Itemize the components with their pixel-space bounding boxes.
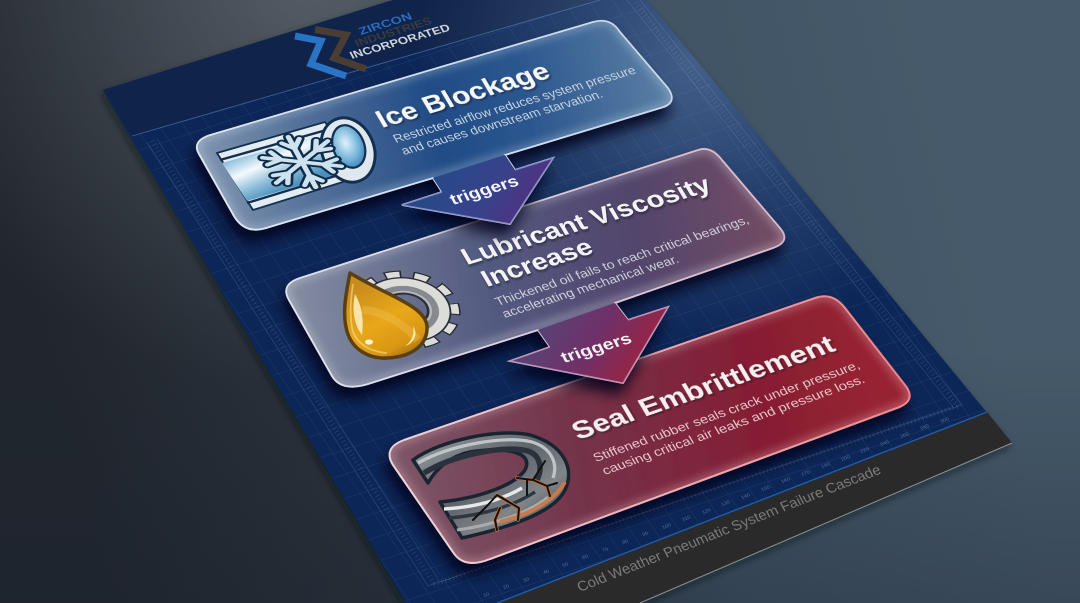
logo: Zircon Industries Incorporated bbox=[295, 11, 452, 76]
heading: Lubricant Viscosity Increase: Increase bbox=[476, 233, 598, 292]
icon: oil drop and gear bbox=[345, 270, 464, 358]
snowflake bbox=[256, 128, 348, 196]
ruler scale numbers: 80 bbox=[621, 539, 630, 546]
description: Restricted airflow reduces system pressure bbox=[390, 63, 638, 145]
footer title: Cold Weather Pneumatic System Failure Cascade bbox=[575, 462, 884, 595]
icon: cracked rubber seal ring bbox=[413, 433, 569, 538]
arrow colour overlay bbox=[510, 303, 668, 383]
description: Thickened oil fails to reach critical bearings, bbox=[492, 213, 751, 308]
card with body bbox=[390, 296, 910, 563]
description: causing critical air leaks and pressure loss. bbox=[599, 372, 867, 477]
ruler scale numbers: 240 bbox=[879, 439, 890, 448]
drop bbox=[345, 273, 427, 358]
ruler scale numbers: 160 bbox=[780, 476, 791, 485]
ruler scale numbers: 170 bbox=[800, 469, 811, 478]
ruler scale numbers: 50 bbox=[561, 562, 570, 569]
blueprint ruler frame bbox=[147, 0, 962, 586]
heading: Lubricant Viscosity Increase: Lubricant Viscosity bbox=[456, 170, 716, 270]
ruler scale numbers: 120 bbox=[701, 507, 712, 516]
ruler scale numbers: 30 bbox=[522, 577, 531, 584]
heading: Seal Embrittlement: Seal Embrittlement bbox=[566, 330, 840, 445]
ruler scale numbers: 140 bbox=[740, 492, 751, 501]
ruler scale numbers: 280 bbox=[919, 423, 930, 432]
ruler scale numbers: 190 bbox=[820, 461, 831, 470]
ruler scale numbers: 60 bbox=[581, 554, 590, 561]
arrow label: triggers bbox=[446, 172, 522, 208]
logo wordmark: INCORPORATED bbox=[348, 22, 452, 61]
ruler scale numbers: 90 bbox=[641, 531, 650, 538]
ruler scale numbers: 20 bbox=[502, 584, 511, 591]
ruler scale numbers: 200 bbox=[840, 454, 851, 463]
logo mark bbox=[295, 30, 366, 76]
logo wordmark: INDUSTRIES bbox=[353, 15, 434, 49]
ruler scale numbers: 260 bbox=[899, 431, 910, 440]
ruler scale numbers: 300 bbox=[939, 416, 950, 425]
ruler scale numbers bbox=[482, 416, 950, 599]
card with triggers arrow bbox=[197, 21, 672, 230]
panel: lubricant viscosity increase bbox=[286, 149, 784, 387]
arrow colour overlay bbox=[402, 155, 553, 224]
ruler scale numbers: 10 bbox=[482, 592, 491, 599]
card with triggers arrow bbox=[286, 149, 784, 387]
panel: ice blockage bbox=[197, 21, 672, 230]
logo wordmark: ZIRCON bbox=[357, 11, 414, 37]
ruler scale numbers: 40 bbox=[542, 569, 551, 576]
icon: frozen pipe with snowflake bbox=[217, 110, 384, 210]
cracks bbox=[473, 461, 557, 530]
ruler scale numbers: 150 bbox=[760, 484, 771, 493]
heading: Ice Blockage: Ice Blockage bbox=[370, 57, 555, 133]
footer band bbox=[497, 412, 1012, 603]
ruler scale numbers: 70 bbox=[601, 547, 610, 554]
description: accelerating mechanical wear. bbox=[499, 252, 681, 320]
description: Stiffened rubber seals crack under pressure, bbox=[590, 358, 862, 464]
panel: seal embrittlement bbox=[390, 296, 910, 563]
ruler scale numbers: 110 bbox=[681, 515, 692, 523]
ruler scale numbers: 100 bbox=[661, 522, 672, 531]
ruler scale numbers: 130 bbox=[720, 499, 731, 508]
description: and causes downstream starvation. bbox=[398, 87, 605, 157]
gear bbox=[346, 270, 464, 350]
arrow label: triggers bbox=[557, 329, 635, 366]
ruler scale numbers: 220 bbox=[859, 446, 870, 455]
pipe mouth bbox=[312, 110, 384, 190]
